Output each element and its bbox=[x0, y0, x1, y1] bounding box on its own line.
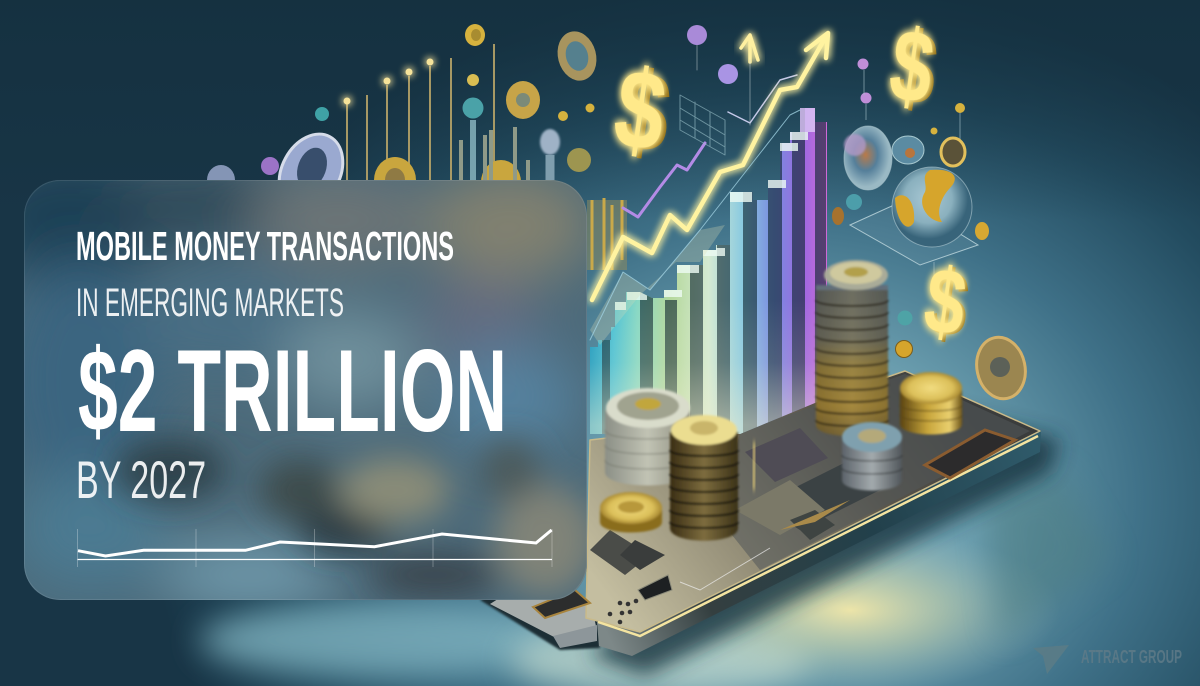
icon: dollar sign lower right: $ bbox=[922, 250, 975, 358]
coin: single flat gold bbox=[600, 492, 662, 532]
icon: glowing dollar signs bbox=[607, 7, 975, 358]
illustration: glowing growth arrows bbox=[590, 27, 828, 345]
icon: dollar sign left: $ bbox=[612, 47, 678, 178]
panel: frosted glass card bbox=[24, 180, 587, 600]
illustration: floating coins and pins on the left bbox=[207, 24, 627, 270]
logo: attract group bbox=[1033, 645, 1182, 674]
coin stack: dark gold front bbox=[670, 415, 738, 541]
illustration: coin stacks bbox=[600, 260, 962, 541]
illustration: phone circuit board bbox=[480, 371, 1060, 676]
illustration: glowing bar chart bbox=[590, 100, 830, 440]
icon: dollar sign top right: $ bbox=[883, 7, 940, 125]
text: by 2027: BY 2027 bbox=[76, 451, 206, 510]
coin stack: tall centre bbox=[816, 260, 888, 436]
line chart bbox=[78, 529, 552, 567]
icon: dollar sign left: $ bbox=[607, 45, 673, 176]
key figure: $2 trillion: $2 TRILLION bbox=[78, 325, 507, 456]
icon: paper plane logo bbox=[1033, 645, 1069, 674]
icon: dollar sign lower right: $ bbox=[919, 248, 972, 356]
coin stack: silver wide bbox=[605, 388, 690, 486]
coin stack: gold back right bbox=[900, 372, 962, 434]
heading: mobile money transactions: MOBILE MONEY TRANSACTIONS bbox=[76, 223, 454, 269]
illustration: floating spheres and globe bbox=[687, 25, 1031, 403]
icon: dollar sign top right: $ bbox=[887, 9, 944, 127]
coin stack: blue-grey bbox=[842, 422, 902, 490]
subheading: in emerging markets: IN EMERGING MARKETS bbox=[76, 281, 344, 325]
